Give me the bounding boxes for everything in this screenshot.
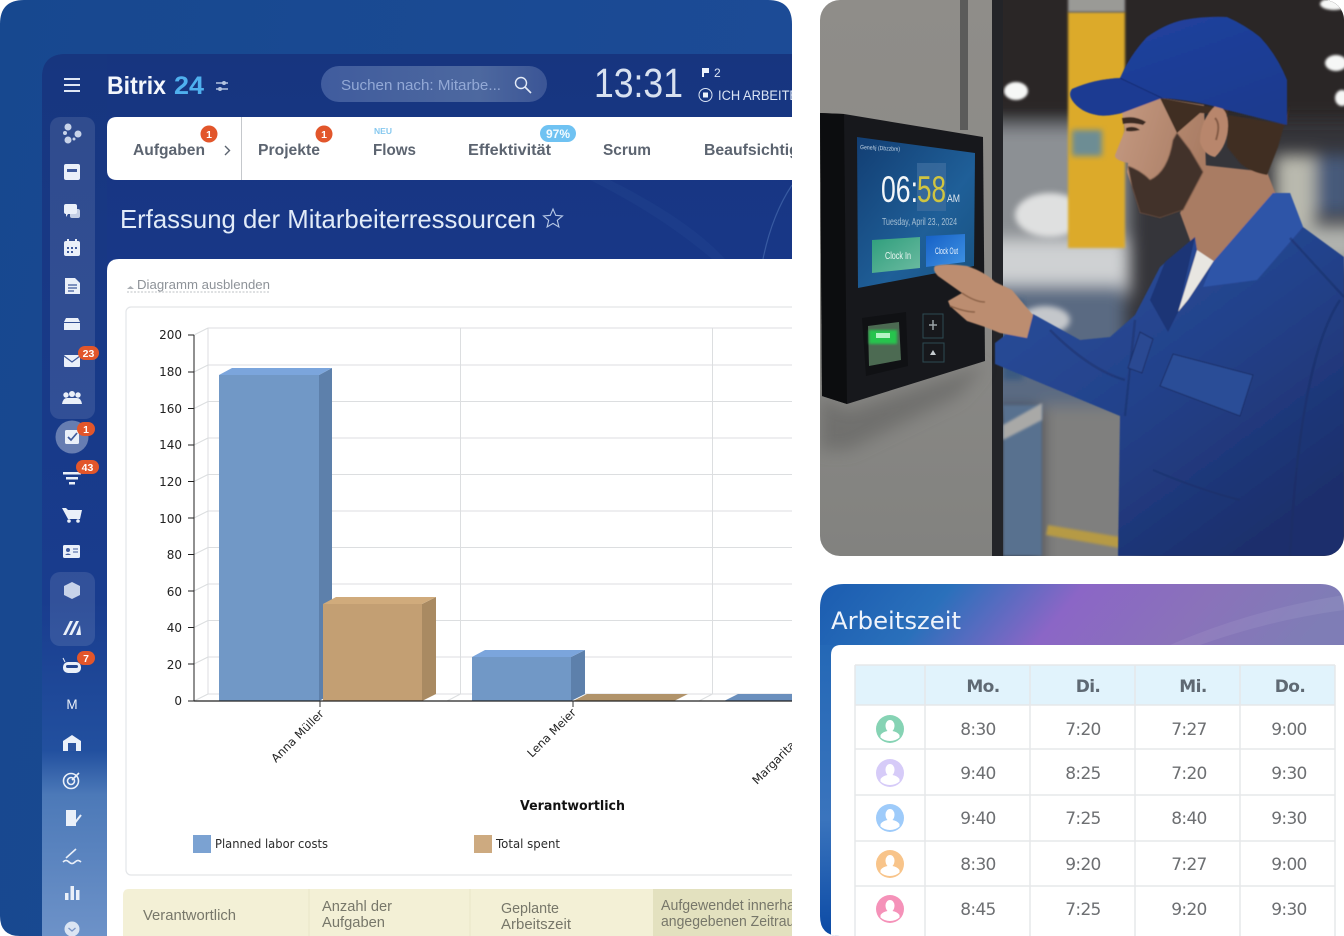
icon: tasks: [65, 430, 79, 444]
table card: [831, 645, 1344, 936]
tab bar: 97%: [546, 127, 570, 141]
row 3: 8:40: [1171, 809, 1207, 829]
brow and eye: [1122, 117, 1146, 131]
x axis: Margarita: [749, 738, 798, 787]
row 3: 7:25: [1065, 809, 1101, 829]
badge: 23: [78, 346, 99, 360]
device screen: AM: [947, 193, 960, 205]
badge: 1: 1: [83, 424, 89, 436]
tab bar: 1: [206, 129, 212, 141]
row 1: 8:30: [960, 720, 996, 740]
row 2: [876, 759, 1307, 787]
icon: market: [63, 621, 81, 635]
table header row: Mi.: [1179, 677, 1207, 697]
chart card: [126, 307, 846, 875]
hair: [1160, 98, 1290, 175]
badge: 43: 43: [82, 462, 93, 474]
panel: inner dark app frame: [42, 54, 792, 936]
worker: [934, 17, 1344, 556]
panel: Bitrix24 application window: [0, 0, 846, 936]
time clock device: [820, 113, 985, 404]
jacket folds and seams: [1050, 238, 1344, 556]
tab bar: Effektivität: [468, 142, 552, 159]
heading: Arbeitszeit: Arbeitszeit: [831, 607, 961, 635]
tab bar: Projekte: [258, 142, 320, 159]
heading: Erfassung der Mitarbeiterressourcen: [120, 204, 536, 234]
small chest pocket: [1128, 332, 1153, 373]
icon: news: [64, 164, 80, 180]
x axis: Lena Meier: [524, 705, 579, 760]
x axis: [194, 701, 798, 814]
row 5: 8:45: [960, 900, 996, 920]
hand: [934, 264, 1033, 338]
tab bar: NEU: [374, 127, 392, 136]
row 3: 9:30: [1271, 809, 1307, 829]
icon: cart: [62, 508, 82, 523]
icon: calendar: [64, 239, 80, 256]
row 4: [876, 850, 1307, 878]
x axis: Anna Müller: [268, 707, 327, 765]
device screen: 06:: [881, 169, 918, 210]
search field: [321, 66, 547, 102]
work status: ICH ARBEITE: [718, 88, 798, 103]
icon: contact card: [63, 545, 80, 558]
icon: warehouse: [63, 735, 81, 751]
bar: Margarita planned: [724, 694, 792, 701]
device screen: Clock In: [885, 250, 911, 262]
row 2: 9:40: [960, 764, 996, 784]
jacket collar: [1203, 193, 1303, 287]
device screen: Tuesday, April 23., 2024: [882, 217, 957, 228]
y axis: 120: [159, 475, 182, 489]
icon: bar chart: [65, 886, 80, 900]
row 1: [876, 715, 1307, 743]
icon: sites: [63, 124, 82, 144]
work status: [698, 68, 792, 102]
y axis: 160: [159, 402, 182, 416]
sidebar icons: [50, 117, 99, 936]
device screen: 58: [917, 169, 946, 210]
cap: [1070, 17, 1287, 125]
device screen: [857, 137, 975, 288]
3D bar chart: [159, 328, 798, 853]
logo: Bitrix 24: Bitrix: [107, 72, 166, 100]
tab bar: Aufgaben: [133, 142, 205, 159]
icon: chat: [64, 204, 80, 218]
icon: mail: [64, 355, 80, 367]
face: [1115, 98, 1206, 218]
table header row: Mo.: [966, 677, 1000, 697]
row 3: [876, 804, 1307, 832]
fingerprint scanner: [862, 312, 908, 376]
icon: people: [62, 391, 82, 404]
y axis: [159, 328, 194, 708]
badge: 7: [77, 651, 95, 665]
y axis: 100: [159, 512, 182, 526]
logo: Bitrix 24: 24: [174, 72, 204, 100]
row 1: 7:20: [1065, 720, 1101, 740]
logo: Bitrix 24: [108, 76, 228, 94]
icon: CRM funnel: [63, 472, 81, 484]
table header: [123, 889, 806, 936]
y axis: 200: [159, 328, 182, 342]
factory background: [985, 0, 1344, 575]
tab bar: Beaufsichtigt: [704, 142, 805, 159]
row 1: 7:27: [1171, 720, 1207, 740]
clock: 13:31: 13:31: [594, 60, 683, 106]
legend: Planned labor costs: [215, 837, 328, 851]
table header: Aufgewendet innerhalb: [661, 898, 806, 914]
row 2: 9:30: [1271, 764, 1307, 784]
tab bar: Scrum: [603, 142, 651, 159]
row 4: 9:20: [1065, 855, 1101, 875]
legend: Total spent: [495, 837, 560, 851]
row 4: 9:00: [1271, 855, 1307, 875]
table header row: Do.: [1275, 677, 1305, 697]
icon: M letter: M: [66, 697, 78, 712]
row 3: 9:40: [960, 809, 996, 829]
search field: Suchen nach: Mitarbe...: [341, 77, 501, 94]
bar: Lena Meier spent: [573, 694, 688, 701]
table header: Geplante: [501, 901, 559, 917]
icon: drive: [64, 318, 80, 330]
bar: Anna Müller planned: [219, 368, 332, 701]
ear: [1200, 105, 1228, 157]
row 5: 7:25: [1065, 900, 1101, 920]
icon: expand circle: [64, 922, 80, 936]
photo: worker using wall-mounted time clock: [820, 0, 1344, 575]
device screen: Genehj (Dbzzbm): [860, 145, 900, 153]
table grid: [855, 665, 1335, 936]
tab bar: [107, 117, 805, 180]
tab bar: Flows: [373, 142, 416, 159]
x axis: Verantwortlich: [520, 799, 625, 814]
gridlines: [194, 328, 792, 701]
row 5: [876, 895, 1307, 923]
bar: Lena Meier planned: [472, 650, 585, 701]
jacket pocket: [1160, 354, 1253, 416]
table header: angegebenen Zeitraum: [661, 914, 806, 930]
table header: Arbeitszeit: [501, 917, 571, 933]
badge: 23: 23: [83, 348, 94, 360]
icon: edit document: [66, 810, 81, 826]
icon: hamburger menu: [64, 78, 80, 92]
row 4: 7:27: [1171, 855, 1207, 875]
toggle: hide chart: Diagramm ausblenden: [137, 277, 270, 292]
device buttons: [923, 314, 944, 362]
y axis: 80: [167, 548, 182, 562]
y axis: 60: [167, 585, 182, 599]
neck: [1180, 165, 1278, 265]
panel: report content: [107, 259, 846, 936]
icon: box: [64, 582, 80, 599]
y axis: 180: [159, 365, 182, 379]
icon: target: [64, 773, 79, 788]
y axis: 140: [159, 438, 182, 452]
white shirt: [1178, 250, 1215, 312]
icon: robot: [63, 658, 81, 673]
table header: Aufgaben: [322, 915, 385, 931]
row 1: 9:00: [1271, 720, 1307, 740]
legend: [193, 835, 560, 853]
row 4: 8:30: [960, 855, 996, 875]
table header row: [855, 665, 1335, 705]
row 5: 9:20: [1171, 900, 1207, 920]
y axis: 0: [174, 694, 182, 708]
row 5: 9:30: [1271, 900, 1307, 920]
icon: document: [65, 278, 80, 294]
bar: Anna Müller spent: [323, 597, 436, 701]
jacket body and sleeve: [995, 193, 1344, 556]
row 2: 7:20: [1171, 764, 1207, 784]
beard: [1128, 133, 1203, 218]
table header: Verantwortlich: [143, 908, 236, 924]
tab bar: 1: [321, 129, 327, 141]
y axis: 20: [167, 658, 182, 672]
table header: Anzahl der: [322, 899, 392, 915]
badge: 7: 7: [83, 653, 89, 665]
icon: signature: [63, 849, 81, 864]
badge: 1: [77, 422, 95, 436]
device screen: Clock Out: [935, 246, 958, 256]
work status: 2: [714, 66, 721, 80]
badge: 43: [76, 460, 99, 474]
row 2: 8:25: [1065, 764, 1101, 784]
panel: Arbeitszeit timesheet: [820, 584, 1344, 936]
y axis: 40: [167, 621, 182, 635]
concrete wall: [820, 0, 1003, 556]
table header row: Di.: [1076, 677, 1100, 697]
